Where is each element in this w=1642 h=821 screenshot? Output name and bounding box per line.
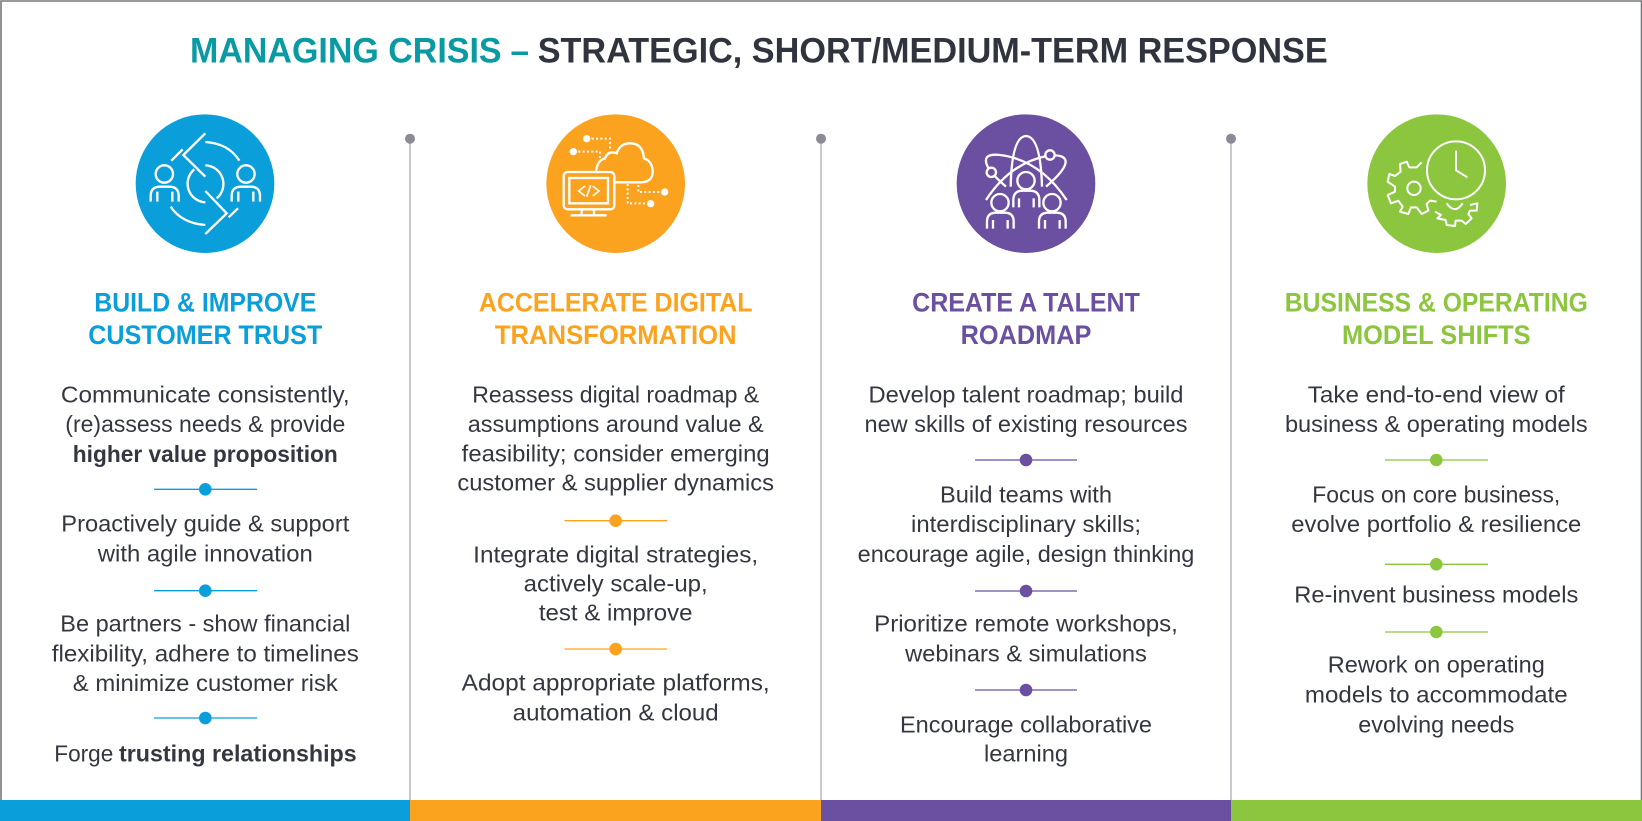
heading: CREATE A TALENT — [912, 288, 1140, 318]
column divider 3 — [1226, 134, 1236, 800]
heading: ROADMAP — [961, 320, 1091, 350]
text: build teams: encourage agile, design thinking — [858, 541, 1194, 567]
text: forge trusting relationships: Forge — [54, 741, 113, 767]
text: reassess digital roadmap: assumptions around value & — [468, 411, 764, 437]
icon: gears and clock — [1367, 114, 1506, 253]
text: rework on operating models — [1305, 652, 1568, 738]
separator — [154, 584, 257, 597]
heading: CUSTOMER TRUST — [88, 320, 322, 350]
text: adopt appropriate platforms: automation & cloud — [513, 700, 719, 726]
heading: ACCELERATE DIGITAL — [479, 288, 753, 318]
text: focus on core business: Focus on core business, — [1312, 481, 1560, 507]
text: develop talent roadmap: Develop talent roadmap; build — [868, 382, 1184, 408]
text: be partners: & minimize customer risk — [73, 670, 338, 696]
icon: monitor and cloud — [546, 114, 685, 253]
text: proactively guide — [61, 511, 350, 567]
text: forge trusting relationships: trusting relationships — [119, 741, 357, 767]
text: rework on operating models: Rework on operating — [1328, 652, 1545, 678]
text: re-invent business models: Re-invent business models — [1294, 581, 1578, 607]
bottom colour bar — [0, 800, 1642, 821]
text: adopt appropriate platforms — [462, 670, 770, 726]
text: be partners — [52, 611, 359, 696]
column divider 1 — [405, 134, 415, 800]
separator — [975, 585, 1077, 597]
text: take end-to-end view: Take end-to-end view of — [1308, 382, 1565, 408]
text: reassess digital roadmap: customer & supplier dynamics — [457, 470, 774, 496]
heading: BUSINESS & OPERATING — [1285, 288, 1588, 318]
text: focus on core business: evolve portfolio & resilience — [1291, 511, 1581, 537]
title: – — [510, 32, 529, 71]
title: STRATEGIC, SHORT/MEDIUM-TERM RESPONSE — [538, 32, 1328, 71]
text: be partners: flexibility, adhere to timelines — [52, 641, 359, 667]
title: MANAGING CRISIS — [190, 32, 502, 71]
text: reassess digital roadmap — [457, 382, 774, 496]
panel: business and operating model shifts — [1285, 114, 1588, 738]
text: be partners: Be partners - show financial — [60, 611, 350, 637]
text: proactively guide: Proactively guide & support — [61, 511, 350, 537]
text: encourage collaborative learning: learning — [984, 741, 1068, 767]
text: build teams — [858, 481, 1194, 567]
panel: accelerate digital transformation — [457, 114, 774, 726]
text: rework on operating models: models to accommodate — [1305, 682, 1568, 708]
text: communicate consistently: (re)assess needs & provide — [65, 411, 345, 437]
heading: BUILD & IMPROVE — [94, 288, 316, 318]
text: take end-to-end view: business & operating models — [1285, 411, 1588, 437]
text: integrate digital strategies: actively scale-up, — [524, 571, 708, 597]
separator — [975, 454, 1077, 466]
heading — [88, 288, 322, 350]
text: reassess digital roadmap: Reassess digital roadmap & — [472, 382, 760, 408]
text: build teams: interdisciplinary skills; — [911, 511, 1141, 537]
panel: build and improve customer trust — [52, 114, 359, 767]
text: integrate digital strategies — [473, 541, 758, 626]
text: focus on core business — [1291, 481, 1581, 537]
heading — [1285, 288, 1588, 350]
text: communicate consistently: Communicate consistently, — [61, 382, 350, 408]
text: encourage collaborative learning: Encourage collaborative — [900, 712, 1152, 738]
text: communicate consistently: higher value proposition — [73, 441, 338, 467]
separator — [1385, 626, 1488, 638]
text: rework on operating models: evolving needs — [1358, 712, 1514, 738]
separator — [564, 643, 667, 655]
text: encourage collaborative learning — [900, 712, 1152, 767]
text: take end-to-end view — [1285, 382, 1588, 437]
text: communicate consistently — [61, 382, 350, 467]
text: prioritize remote workshops: Prioritize remote workshops, — [874, 611, 1178, 637]
separator — [154, 483, 257, 496]
separator — [975, 684, 1077, 696]
text: proactively guide: with agile innovation — [97, 541, 313, 567]
column divider 2 — [816, 134, 826, 800]
title — [190, 32, 1328, 71]
text: adopt appropriate platforms: Adopt appropriate platforms, — [462, 670, 770, 696]
separator — [564, 514, 667, 527]
text: prioritize remote workshops — [874, 611, 1178, 667]
heading: MODEL SHIFTS — [1342, 320, 1531, 350]
text: integrate digital strategies: Integrate digital strategies, — [473, 541, 758, 567]
text: prioritize remote workshops: webinars & simulations — [904, 641, 1147, 667]
text: develop talent roadmap — [864, 382, 1188, 437]
text: reassess digital roadmap: feasibility; consider emerging — [462, 441, 770, 467]
text: build teams: Build teams with — [940, 481, 1112, 507]
icon: team and atom — [957, 114, 1095, 253]
heading — [912, 288, 1140, 350]
text: develop talent roadmap: new skills of existing resources — [864, 411, 1188, 437]
text: integrate digital strategies: test & improve — [539, 600, 693, 626]
separator — [154, 712, 257, 724]
separator — [1385, 454, 1488, 466]
heading: TRANSFORMATION — [495, 320, 737, 350]
separator — [1385, 558, 1488, 571]
icon: customers with exchange arrows — [136, 114, 274, 253]
heading — [479, 288, 753, 350]
panel: create a talent roadmap — [858, 114, 1194, 767]
